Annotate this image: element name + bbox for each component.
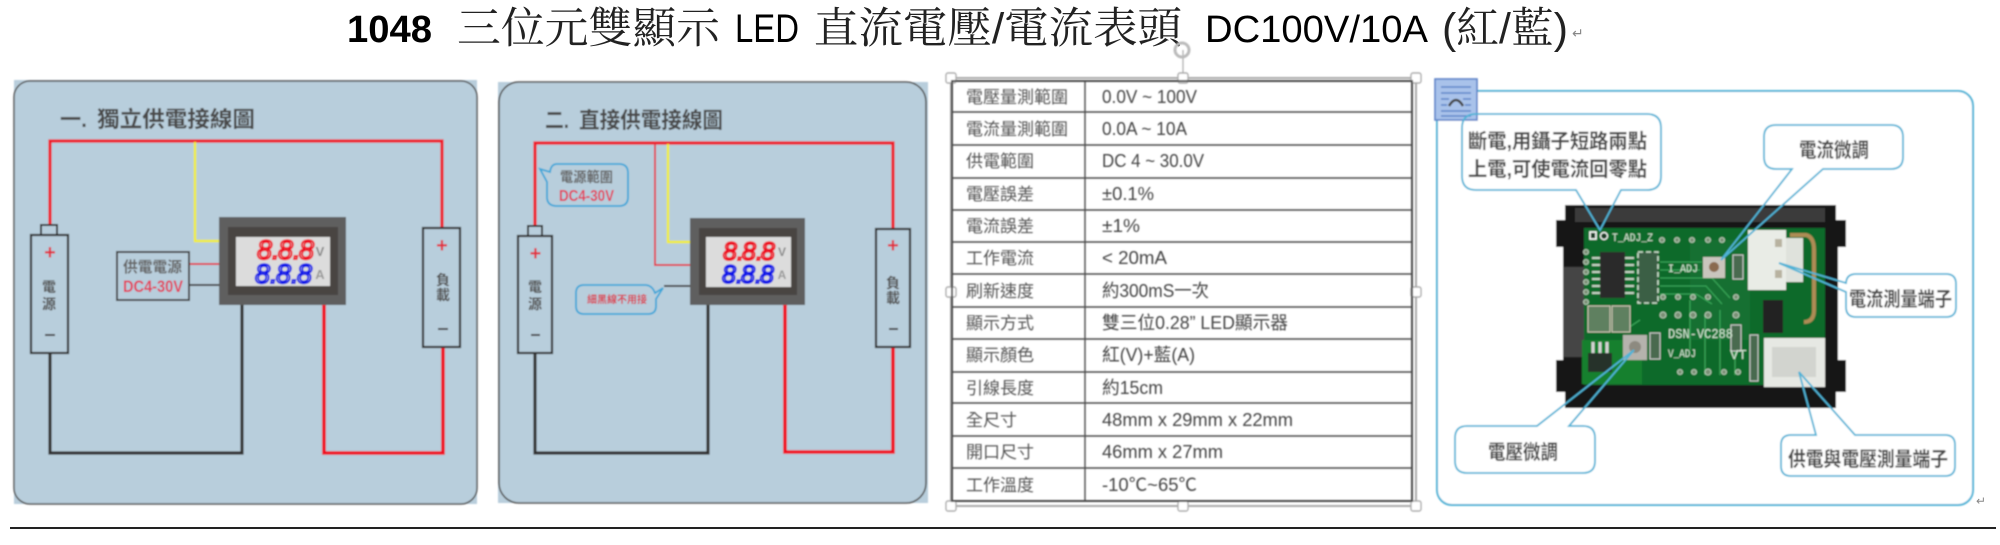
table values xyxy=(1102,87,1293,495)
chip pins xyxy=(1592,258,1634,293)
meter: 8.8.8 xyxy=(722,261,774,289)
table values: < 20mA xyxy=(1102,248,1167,268)
power source battery: + xyxy=(44,242,56,264)
bottom rule xyxy=(10,527,1996,529)
wire: yellow sense xyxy=(668,144,691,242)
load box: 載 xyxy=(886,290,900,306)
table values: 約15cm xyxy=(1102,378,1163,398)
callout: zero current procedure: 斷電,用鑷子短路兩點 xyxy=(1468,129,1647,153)
power source battery: 電 xyxy=(42,279,56,295)
meter xyxy=(690,218,805,305)
wire: thin red power xyxy=(655,144,691,265)
table labels: 電流量測範圍 xyxy=(966,120,1068,139)
panel: PCB back view xyxy=(1435,79,1973,505)
white connector: current xyxy=(1748,230,1803,290)
callout: current trim: 電流微調 xyxy=(1799,139,1869,162)
table labels: 供電範圍 xyxy=(966,152,1034,171)
table labels xyxy=(966,88,1068,495)
selection frame with handles xyxy=(946,43,1421,511)
right IC xyxy=(1763,300,1783,333)
table values: 0.0A ~ 10A xyxy=(1102,119,1187,139)
panel: specification table xyxy=(946,43,1421,511)
zero pads xyxy=(1590,232,1608,240)
supply box: DC4-30V xyxy=(123,277,184,296)
table values: 紅(V)+藍(A) xyxy=(1102,345,1195,365)
callout: voltage trim xyxy=(1455,350,1634,473)
regulator xyxy=(1588,342,1612,372)
wire: yellow sense xyxy=(195,142,220,241)
board silkscreen: DSN-VC288 xyxy=(1668,327,1733,343)
table values: DC 4 ~ 30.0V xyxy=(1102,151,1204,171)
table labels: 全尺寸 xyxy=(966,411,1017,430)
table grid xyxy=(952,81,1412,501)
wire: black return xyxy=(50,305,242,453)
table values: 約300mS一次 xyxy=(1102,281,1209,301)
callout: thin black wire unused: 細黑線不用接 xyxy=(587,293,647,306)
callout: zero current procedure: 上電,可使電流回零點 xyxy=(1468,158,1647,181)
power source battery: 源 xyxy=(42,296,56,312)
callout: current trim xyxy=(1721,125,1903,260)
table labels: 刷新速度 xyxy=(966,282,1034,301)
table values: 46mm x 27mm xyxy=(1102,442,1223,462)
meter: 8.8.8 xyxy=(255,259,312,289)
table values: 48mm x 29mm x 22mm xyxy=(1102,410,1293,430)
table values: 雙三位0.28” LED顯示器 xyxy=(1102,313,1288,333)
power source battery xyxy=(31,225,68,353)
meter: 8.8.8 xyxy=(723,238,775,266)
table labels: 引線長度 xyxy=(966,379,1034,398)
title: (紅/藍) xyxy=(1442,5,1568,53)
power source battery: 源 xyxy=(528,296,542,312)
wire: black return xyxy=(535,305,708,453)
title xyxy=(347,5,1584,53)
callout: supply and voltage terminal xyxy=(1781,372,1955,476)
callout: current terminal: 電流測量端子 xyxy=(1849,288,1952,311)
title: 三位元雙顯示 xyxy=(457,5,721,53)
wire: unused thin black xyxy=(664,285,691,287)
panel frame xyxy=(1437,91,1973,505)
board traces xyxy=(1625,262,1735,375)
icon: text wrap layout xyxy=(1435,79,1477,120)
title: DC100V/10A xyxy=(1205,9,1429,51)
board silkscreen: VT xyxy=(1730,348,1747,364)
wire: red supply xyxy=(50,141,442,229)
white connector: supply xyxy=(1764,338,1825,387)
load box: 載 xyxy=(436,287,450,303)
table values: -10℃~65℃ xyxy=(1102,475,1197,495)
callout: supply range: 電源範圍 xyxy=(560,169,613,185)
table labels: 開口尺寸 xyxy=(966,443,1034,462)
heading: diagram one: 獨立供電接線圖 xyxy=(97,107,255,132)
table labels: 電壓量測範圍 xyxy=(966,88,1068,107)
callout: supply range: DC4-30V xyxy=(559,188,614,205)
supply box xyxy=(117,252,220,300)
table labels: 工作溫度 xyxy=(966,476,1034,495)
power source battery: 電 xyxy=(528,279,542,295)
load box: 負 xyxy=(436,272,450,288)
callout: zero current procedure xyxy=(1462,114,1661,230)
load box: + xyxy=(887,235,899,257)
table labels: 顯示方式 xyxy=(966,314,1034,333)
meter: A xyxy=(778,268,787,282)
meter: A xyxy=(315,267,325,282)
wire: red load return xyxy=(785,305,893,452)
paragraph mark: ↵ xyxy=(1976,494,1986,508)
title: 1048 xyxy=(347,9,432,51)
table values: 0.0V ~ 100V xyxy=(1102,87,1197,107)
callout: supply range xyxy=(540,164,628,206)
table values: ±0.1% xyxy=(1102,184,1154,204)
callout: voltage trim: 電壓微調 xyxy=(1488,441,1558,464)
power source battery: + xyxy=(530,243,541,265)
wire: red load return xyxy=(324,305,443,453)
load box: 負 xyxy=(886,275,900,291)
panel: direct power wiring diagram xyxy=(498,82,928,503)
supply box: 供電電源 xyxy=(123,259,182,276)
wire: red supply xyxy=(535,143,893,230)
heading: diagram two: 二. xyxy=(545,108,569,133)
table labels: 工作電流 xyxy=(966,249,1034,268)
board silkscreen xyxy=(1612,233,1747,364)
IC chip xyxy=(1600,252,1625,298)
heading: diagram two: 直接供電接線圖 xyxy=(579,108,723,133)
trim pot: voltage xyxy=(1623,335,1647,360)
meter: 8.8.8 xyxy=(257,235,314,265)
callout: supply and voltage terminal: 供電與電壓測量端子 xyxy=(1788,448,1948,471)
resistor network xyxy=(1638,252,1658,303)
trim pot: current xyxy=(1703,257,1725,278)
photo: meter circuit board xyxy=(1556,205,1846,408)
load box xyxy=(876,229,910,347)
meter: V xyxy=(778,245,786,259)
copper shunt loop xyxy=(1790,235,1814,322)
load box: + xyxy=(436,235,448,257)
callout: current terminal xyxy=(1779,263,1956,317)
board silkscreen: T_ADJ_Z xyxy=(1612,233,1653,245)
title: 直流電壓/電流表頭 xyxy=(814,5,1183,53)
title: ↵ xyxy=(1572,25,1584,41)
small components xyxy=(1588,255,1758,381)
power source battery xyxy=(518,226,552,353)
panel: independent power wiring diagram xyxy=(14,80,477,504)
load box xyxy=(423,228,460,347)
table values: ±1% xyxy=(1102,216,1140,236)
heading: diagram one: 一. xyxy=(60,107,87,132)
meter: V xyxy=(316,244,325,259)
board silkscreen: V_ADJ xyxy=(1668,349,1696,361)
title: LED xyxy=(735,7,799,51)
table labels: 電流誤差 xyxy=(966,217,1034,236)
callout: thin black wire unused xyxy=(576,285,663,314)
table labels: 電壓誤差 xyxy=(966,185,1034,204)
meter xyxy=(219,217,346,305)
solder holes xyxy=(1584,238,1740,375)
table labels: 顯示顏色 xyxy=(966,346,1034,365)
board silkscreen: I_ADJ xyxy=(1668,264,1698,276)
